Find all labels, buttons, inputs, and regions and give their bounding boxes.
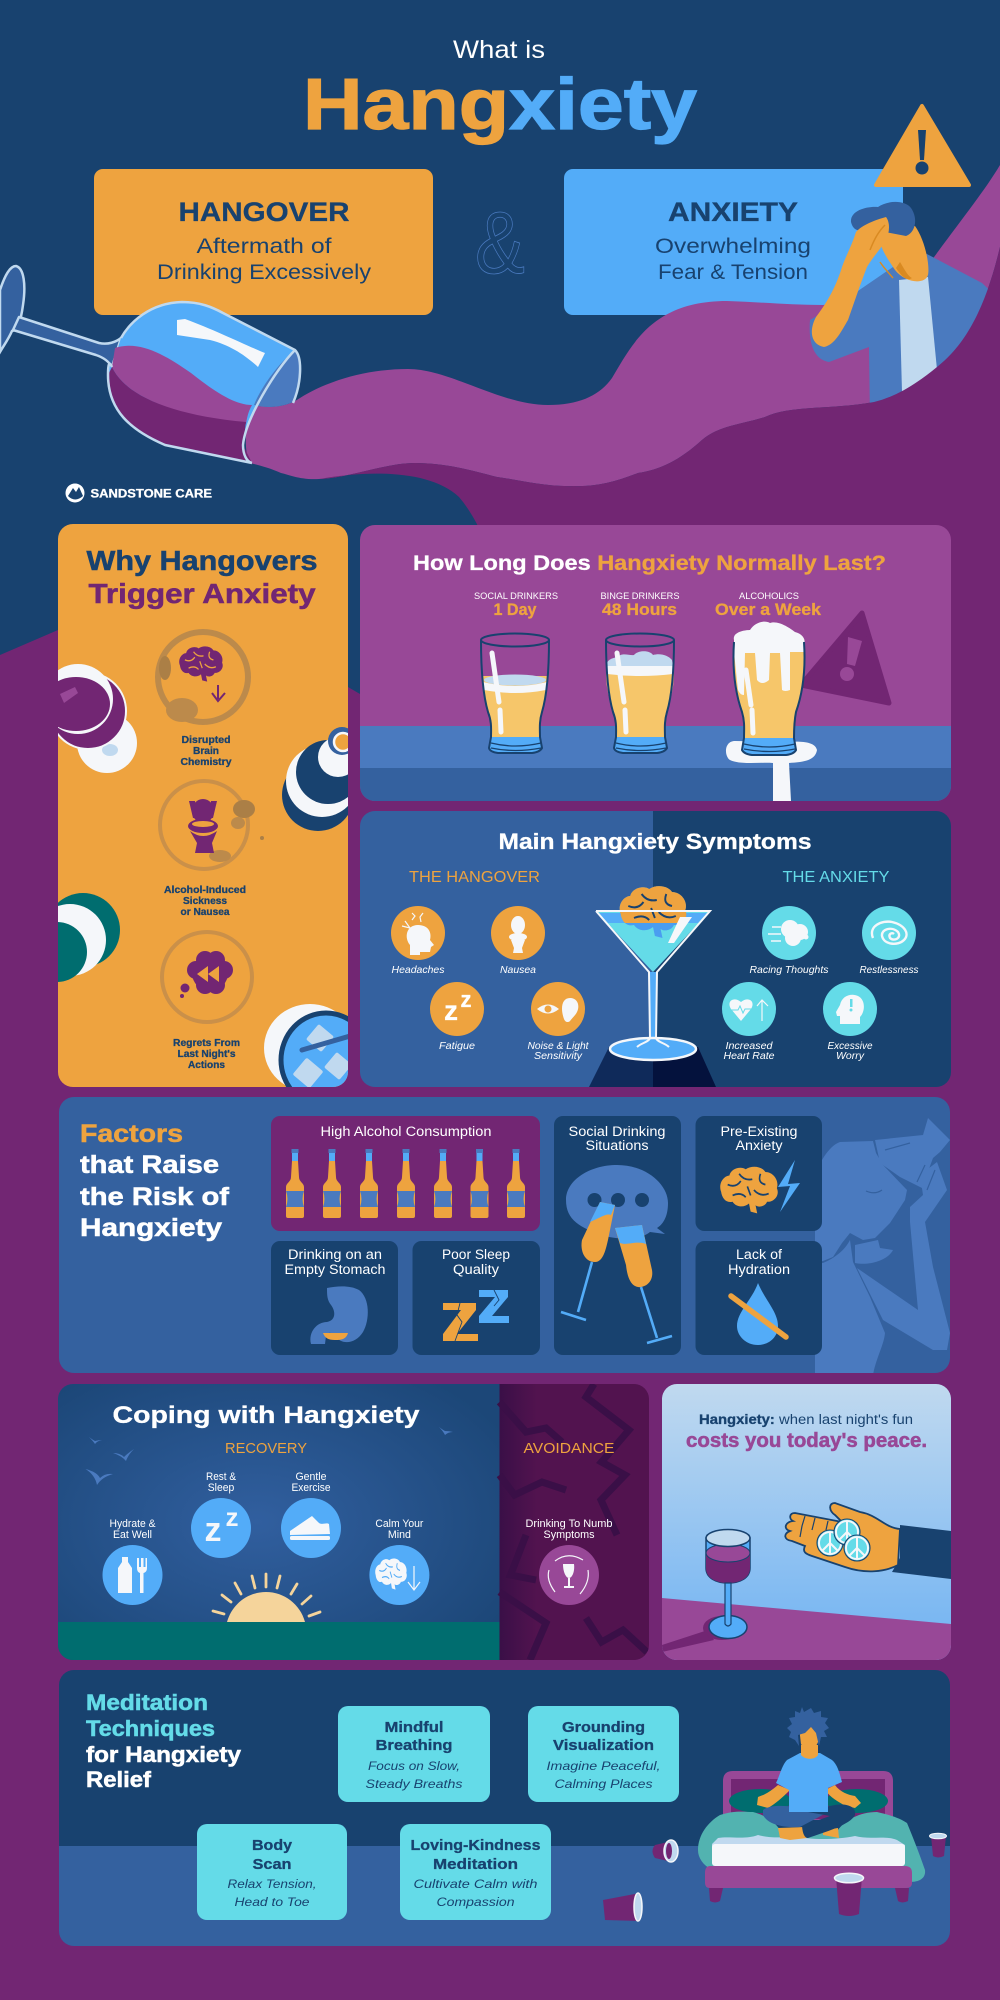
heading: symptoms: Main Hangxiety Symptoms xyxy=(498,829,812,854)
glass: alcoholics: Over a Week xyxy=(715,600,822,619)
dark purple wave foreground xyxy=(319,247,1000,535)
heading: factors: that Raise xyxy=(80,1151,219,1179)
heading: factors: the Risk of xyxy=(80,1183,230,1211)
card: social drinking situations: Social Drinking xyxy=(568,1124,666,1139)
logo: Sandstone Care: SANDSTONE CARE xyxy=(90,486,212,500)
heading: avoidance: AVOIDANCE xyxy=(524,1440,614,1457)
item: rest and sleep: Sleep xyxy=(208,1482,234,1494)
card: grounding visualization: Visualization xyxy=(553,1738,654,1754)
card: loving-kindness meditation xyxy=(400,1824,551,1920)
card: social drinking situations: Situations xyxy=(586,1138,649,1153)
panel: hangover definition: Drinking Excessively xyxy=(157,261,372,284)
heading: meditation: Relief xyxy=(86,1767,152,1792)
panel: hangover definition: HANGOVER xyxy=(178,197,350,227)
illustration: fallen cup, left xyxy=(603,1893,642,1921)
heading: why hangovers xyxy=(86,545,318,609)
card: drinking on an empty stomach xyxy=(271,1241,398,1355)
illustration: tipped wine glass xyxy=(0,266,300,463)
card: grounding visualization: Imagine Peaceful, xyxy=(546,1759,660,1773)
glass: binge drinkers: 48 Hours xyxy=(602,600,677,619)
card: mindful breathing xyxy=(338,1706,490,1802)
symptom: fatigue: Fatigue xyxy=(439,1040,475,1052)
illustration: cup at foot of bed xyxy=(834,1873,864,1916)
card: loving-kindness meditation: Meditation xyxy=(433,1857,518,1873)
item: hydrate and eat well xyxy=(102,1518,162,1605)
icon: rising sun xyxy=(213,1574,320,1622)
panel: factors that raise the risk xyxy=(59,1097,950,1375)
card: body scan: Scan xyxy=(252,1857,292,1873)
card: pre-existing anxiety xyxy=(696,1116,822,1231)
panel: anxiety definition xyxy=(564,169,903,315)
card: mindful breathing: Breathing xyxy=(376,1738,452,1754)
card: loving-kindness meditation: Compassion xyxy=(436,1895,515,1909)
illustration: bed xyxy=(698,1771,925,1902)
panel: anxiety definition: Fear & Tension xyxy=(658,261,808,284)
item: hydrate and eat well: Hydrate & xyxy=(110,1518,156,1530)
decoration: bottle from above xyxy=(282,727,348,831)
symptom: excessive worry xyxy=(823,982,877,1062)
glass: social drinkers xyxy=(474,591,558,753)
item: rest and sleep: Rest & xyxy=(206,1471,237,1483)
symptom: excessive worry: Worry xyxy=(836,1050,865,1062)
symptom: headaches xyxy=(391,906,445,976)
symptom: headaches: Headaches xyxy=(392,964,445,976)
heading: why hangovers: Trigger Anxiety xyxy=(88,578,316,609)
symptom: fatigue xyxy=(430,982,484,1052)
text: tagline: costs you today's peace. xyxy=(686,1430,927,1452)
decoration: iced drink from above xyxy=(264,1004,348,1087)
ampersand: & xyxy=(475,193,525,292)
panel: meditation techniques xyxy=(59,1670,950,1946)
card: loving-kindness meditation: Cultivate Calm with xyxy=(414,1877,538,1891)
item: alcohol-induced sickness: Sickness xyxy=(183,896,227,907)
card: body scan xyxy=(197,1824,347,1920)
item: rest and sleep: z xyxy=(226,1502,238,1532)
panel: how long does hangxiety last xyxy=(360,525,951,801)
panel: why hangovers trigger anxiety xyxy=(58,524,348,1087)
card: body scan: Relax Tension, xyxy=(228,1877,316,1891)
symptom: increased heart rate: Heart Rate xyxy=(724,1050,775,1062)
symptom: racing thoughts: Racing Thoughts xyxy=(750,964,829,976)
card: lack of hydration xyxy=(696,1241,822,1355)
icon: warning triangle xyxy=(876,106,969,185)
item: drinking to numb symptoms: Drinking To Numb xyxy=(526,1518,612,1530)
logo: Sandstone Care xyxy=(66,484,212,502)
text: tagline: Hangxiety: when last night's fun xyxy=(699,1412,913,1427)
item: disrupted brain chemistry xyxy=(158,632,248,768)
card: poor sleep quality: Quality xyxy=(453,1262,499,1277)
item: alcohol-induced sickness xyxy=(160,781,264,918)
heading: coping: Coping with Hangxiety xyxy=(112,1402,420,1429)
symptom: fatigue: z xyxy=(444,995,458,1026)
panel: anxiety definition: ANXIETY xyxy=(668,197,798,227)
title xyxy=(303,36,697,145)
glass: binge drinkers xyxy=(600,591,680,753)
item: hydrate and eat well: Eat Well xyxy=(113,1529,152,1541)
glass: alcoholics xyxy=(715,591,822,801)
card: pre-existing anxiety: Anxiety xyxy=(736,1138,783,1153)
heading: meditation: Techniques xyxy=(86,1716,215,1741)
item: alcohol-induced sickness: Alcohol-Induced xyxy=(164,885,246,896)
heading: recovery: RECOVERY xyxy=(225,1440,307,1457)
glass: social drinkers: SOCIAL DRINKERS xyxy=(474,591,558,602)
heading: the anxiety: THE ANXIETY xyxy=(782,869,890,886)
symptom: increased heart rate xyxy=(722,982,776,1062)
panel: hangover definition: Aftermath of xyxy=(196,235,332,258)
heading: meditation: for Hangxiety xyxy=(86,1742,242,1767)
illustration: cup at right wall xyxy=(930,1833,946,1858)
card: mindful breathing: Mindful xyxy=(384,1720,444,1736)
item: alcohol-induced sickness: or Nausea xyxy=(180,907,230,918)
illustration: anxious man xyxy=(810,202,1000,420)
heading: meditation: Meditation xyxy=(86,1690,208,1715)
item: disrupted brain chemistry: Brain xyxy=(193,746,219,757)
symptom: noise and light sensitivity xyxy=(528,982,590,1062)
symptom: noise and light sensitivity: Noise & Light xyxy=(528,1040,590,1052)
title: What is xyxy=(453,36,545,64)
illustration: wine glass on table xyxy=(706,1530,750,1638)
background: navy header xyxy=(0,0,1000,694)
symptom: restlessness: Restlessness xyxy=(860,964,919,976)
icon: dark warning triangle xyxy=(801,613,889,703)
item: regrets from last night: Actions xyxy=(188,1060,225,1071)
panel: anxiety definition: Overwhelming xyxy=(655,235,811,258)
item: calm your mind xyxy=(369,1518,429,1605)
card: grounding visualization xyxy=(528,1706,679,1802)
card: high alcohol consumption: High Alcohol Consumption xyxy=(320,1124,492,1139)
card: lack of hydration: Lack of xyxy=(736,1247,782,1262)
item: drinking to numb symptoms: Symptoms xyxy=(544,1529,595,1541)
symptom: nausea: Nausea xyxy=(500,964,536,976)
title: Hang xiety xyxy=(303,65,697,145)
item: calm your mind: Mind xyxy=(388,1529,411,1541)
decoration: teal cup from above xyxy=(58,893,120,982)
item: regrets from last night xyxy=(162,932,252,1071)
decoration: wine glass from above xyxy=(58,664,137,773)
item: gentle exercise xyxy=(281,1471,341,1558)
heading: factors: Factors xyxy=(80,1120,183,1148)
item: calm your mind: Calm Your xyxy=(375,1518,424,1530)
symptom: increased heart rate: Increased xyxy=(726,1040,774,1052)
item: gentle exercise: Exercise xyxy=(292,1482,330,1494)
heading: how long: How Long Does Hangxiety Normally Last? xyxy=(413,551,886,575)
heading: factors: Hangxiety xyxy=(80,1214,222,1242)
panel: coping with hangxiety xyxy=(58,1384,650,1660)
heading: why hangovers: Why Hangovers xyxy=(86,545,318,576)
glass: binge drinkers: BINGE DRINKERS xyxy=(600,591,680,602)
symptom: nausea xyxy=(491,906,545,976)
symptom: restlessness xyxy=(860,906,919,976)
card: mindful breathing: Focus on Slow, xyxy=(368,1759,460,1773)
card: body scan: Body xyxy=(252,1838,292,1854)
illustration: martini glass with brain xyxy=(596,886,710,1060)
item: drinking to numb symptoms xyxy=(526,1518,612,1605)
illustration: fallen cup, back xyxy=(652,1840,678,1862)
symptom: excessive worry: Excessive xyxy=(828,1040,873,1052)
item: rest and sleep xyxy=(191,1471,251,1558)
heading: factors xyxy=(80,1120,230,1242)
card: poor sleep quality xyxy=(412,1241,540,1355)
card: loving-kindness meditation: Loving-Kindness xyxy=(410,1838,540,1854)
card: pre-existing anxiety: Pre-Existing xyxy=(720,1124,798,1139)
card: poor sleep quality: Poor Sleep xyxy=(442,1247,510,1262)
heading: the hangover: THE HANGOVER xyxy=(409,869,540,886)
card: high alcohol consumption xyxy=(271,1116,540,1231)
illustration: hand offering peace coins xyxy=(785,1503,951,1579)
heading: meditation xyxy=(86,1690,242,1792)
card: social drinking situations xyxy=(554,1116,681,1355)
symptom: fatigue: z xyxy=(460,987,472,1012)
card: drinking on an empty stomach: Empty Stomach xyxy=(284,1262,386,1277)
card: body scan: Head to Toe xyxy=(234,1895,310,1909)
glass: alcoholics: ALCOHOLICS xyxy=(739,591,799,602)
symptom: racing thoughts xyxy=(750,906,829,976)
wine ribbon xyxy=(246,165,1000,486)
item: regrets from last night: Last Night's xyxy=(178,1049,236,1060)
illustration: meditating person xyxy=(757,1707,861,1840)
item: gentle exercise: Gentle xyxy=(296,1471,326,1483)
panel: hangover definition xyxy=(94,169,433,315)
card: lack of hydration: Hydration xyxy=(728,1262,790,1277)
panel: today's peace xyxy=(662,1384,951,1660)
item: disrupted brain chemistry: Chemistry xyxy=(180,757,232,768)
glass: social drinkers: 1 Day xyxy=(494,600,537,619)
item: rest and sleep: z xyxy=(204,1511,222,1549)
decoration: birds xyxy=(86,1427,453,1485)
panel: main hangxiety symptoms xyxy=(360,811,951,1087)
item: regrets from last night: Regrets From xyxy=(173,1038,240,1049)
card: grounding visualization: Grounding xyxy=(562,1720,645,1736)
illustration: woman silhouette with ice pack xyxy=(815,1118,950,1375)
card: mindful breathing: Steady Breaths xyxy=(366,1777,462,1791)
symptom: noise and light sensitivity: Sensitivity xyxy=(534,1050,583,1062)
card: grounding visualization: Calming Places xyxy=(554,1777,652,1791)
text: tagline xyxy=(686,1412,927,1452)
card: drinking on an empty stomach: Drinking on an xyxy=(288,1247,382,1262)
item: disrupted brain chemistry: Disrupted xyxy=(182,735,230,746)
